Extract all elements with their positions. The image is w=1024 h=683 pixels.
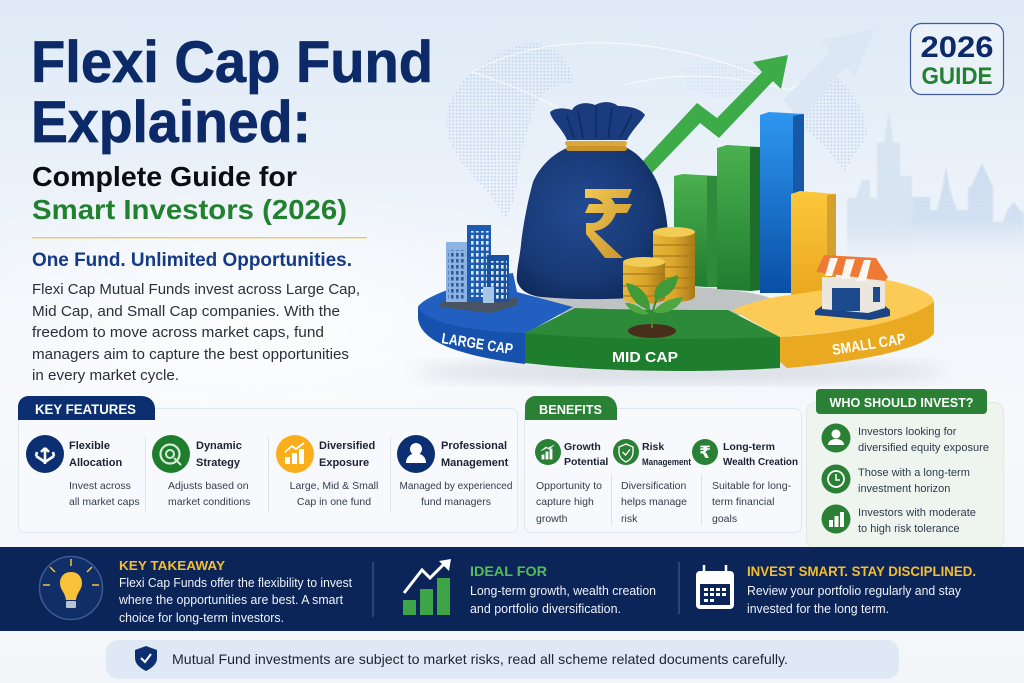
platform: mid cap: [525, 308, 780, 371]
intro paragraph: [32, 281, 360, 384]
feature: dynamic strategy: Strategy: [196, 457, 241, 469]
section tab: BENEFITS: [539, 402, 602, 417]
subtitle: [32, 161, 347, 225]
icon: small shop: [815, 255, 890, 320]
feature: diversified exposure: Exposure: [319, 457, 369, 469]
feature: dynamic strategy: Adjusts based on: [168, 480, 249, 492]
platform centre floor: [525, 286, 775, 320]
item: moderate to high risk: Investors with moderate: [858, 507, 976, 519]
benefit: risk management: [613, 439, 691, 525]
benefit: long-term wealth creation: Long-term: [723, 441, 775, 453]
item: long-term horizon: [822, 464, 970, 495]
section tab: WHO SHOULD INVEST?: [830, 395, 974, 410]
intro paragraph: Mid Cap, and Small Cap companies. With the: [32, 303, 340, 320]
disclaimer bar: Mutual Fund investments are subject to market risks, read all scheme related documents carefully.: [172, 651, 788, 667]
benefit: long-term wealth creation: ₹: [699, 443, 711, 463]
intro paragraph: Flexi Cap Mutual Funds invest across Large Cap,: [32, 281, 360, 298]
benefit: long-term wealth creation: [692, 439, 798, 525]
background faint arrow: [783, 29, 875, 120]
benefit: growth potential: Growth: [564, 441, 601, 453]
platform: large cap: [418, 273, 573, 364]
title: [31, 30, 433, 155]
feature: flexible allocation: Allocation: [69, 457, 122, 469]
section tab: KEY FEATURES: [35, 402, 136, 417]
invest smart: invested for the long term.: [747, 602, 889, 616]
panel: key features: [18, 396, 518, 532]
icon: gold coins: [623, 227, 695, 304]
rupee symbol: [585, 189, 632, 258]
background skyline: [847, 112, 1024, 268]
key takeaway: where the opportunities are best. A smart: [118, 593, 344, 607]
panel: who should invest: [806, 389, 1004, 548]
platform: small cap: SMALL CAP: [831, 331, 907, 359]
platform shadow: [415, 360, 945, 384]
badge: 2026 guide: 2026: [920, 31, 994, 64]
money bag: [517, 102, 668, 299]
title: Explained:: [31, 90, 311, 155]
tagline: One Fund. Unlimited Opportunities.: [32, 250, 352, 271]
intro paragraph: in every market cycle.: [32, 367, 179, 384]
item: diversified exposure: diversified equity exposure: [858, 442, 989, 454]
bottom navy band: [0, 547, 1024, 631]
benefit: risk management: Risk: [642, 441, 664, 453]
item: moderate to high risk: to high risk tolerance: [858, 523, 960, 535]
feature: flexible allocation: all market caps: [69, 496, 140, 508]
feature: professional management: Professional: [441, 440, 507, 452]
benefit: long-term wealth creation: Wealth Creation: [723, 456, 798, 468]
disclaimer bar: [106, 640, 899, 679]
panel: benefits: [524, 396, 802, 532]
benefit: long-term wealth creation: goals: [712, 513, 737, 525]
item: diversified exposure: Investors looking for: [858, 426, 957, 438]
ideal for: Long-term growth, wealth creation: [470, 584, 656, 598]
feature: diversified exposure: Large, Mid & Small: [290, 480, 378, 492]
item: long-term horizon: investment horizon: [858, 483, 950, 495]
platform: large cap: LARGE CAP: [440, 330, 514, 358]
icon: sapling: [625, 275, 683, 338]
benefit: risk management: Management: [642, 457, 691, 467]
feature: dynamic strategy: market conditions: [168, 496, 250, 508]
feature: diversified exposure: Diversified: [319, 440, 375, 452]
feature: dynamic strategy: [152, 435, 250, 508]
feature: professional management: Managed by experienced: [400, 480, 513, 492]
feature: professional management: fund managers: [421, 496, 491, 508]
subtitle: Complete Guide for: [32, 161, 297, 192]
intro paragraph: freedom to move across market caps, fund: [32, 324, 324, 341]
benefit: growth potential: [535, 439, 608, 525]
green growth arrow: [642, 55, 788, 173]
key takeaway: [40, 556, 353, 625]
section tab: [18, 396, 155, 420]
background world map: [446, 42, 868, 217]
feature: dynamic strategy: Dynamic: [196, 440, 242, 452]
key takeaway: Flexi Cap Funds offer the flexibility to invest: [119, 576, 353, 590]
title: Flexi Cap Fund: [31, 30, 433, 95]
invest smart: [696, 563, 976, 616]
invest smart: INVEST SMART. STAY DISCIPLINED.: [747, 563, 976, 579]
ideal for: IDEAL FOR: [470, 563, 547, 579]
intro paragraph: managers aim to capture the best opportunities: [32, 346, 349, 363]
item: moderate to high risk: [822, 504, 976, 535]
benefit: growth potential: growth: [536, 513, 568, 525]
platform: small cap: [732, 280, 934, 368]
benefit: growth potential: capture high: [536, 496, 594, 508]
benefit: growth potential: Potential: [564, 456, 608, 468]
benefit: risk management: helps manage: [621, 496, 687, 508]
feature: professional management: Management: [441, 457, 509, 469]
item: long-term horizon: Those with a long-term: [858, 467, 970, 479]
benefit: growth potential: Opportunity to: [536, 480, 602, 492]
feature: diversified exposure: [276, 435, 378, 508]
feature: flexible allocation: Invest across: [69, 480, 131, 492]
feature: diversified exposure: Cap in one fund: [297, 496, 371, 508]
invest smart: Review your portfolio regularly and stay: [747, 584, 962, 598]
section tab: [816, 389, 987, 414]
platform: mid cap: MID CAP: [612, 349, 678, 366]
benefit: long-term wealth creation: Suitable for long-: [712, 480, 791, 492]
benefit: risk management: risk: [621, 513, 638, 525]
benefit: risk management: Diversification: [621, 480, 687, 492]
feature: professional management: [397, 435, 513, 508]
bar chart: [674, 112, 836, 296]
key takeaway: choice for long-term investors.: [119, 611, 284, 625]
item: diversified exposure: [822, 424, 989, 454]
benefit: long-term wealth creation: term financial: [712, 496, 774, 508]
icon: city buildings: [439, 225, 517, 313]
badge: 2026 guide: [910, 24, 1004, 94]
icon: shield: [135, 646, 157, 671]
badge: 2026 guide: GUIDE: [922, 63, 992, 90]
section tab: [525, 396, 617, 420]
subtitle: Smart Investors (2026): [32, 194, 347, 225]
feature: flexible allocation: Flexible: [69, 440, 110, 452]
ideal for: [403, 559, 656, 616]
feature: flexible allocation: [26, 435, 140, 508]
ideal for: and portfolio diversification.: [470, 602, 621, 616]
key takeaway: KEY TAKEAWAY: [119, 558, 225, 573]
